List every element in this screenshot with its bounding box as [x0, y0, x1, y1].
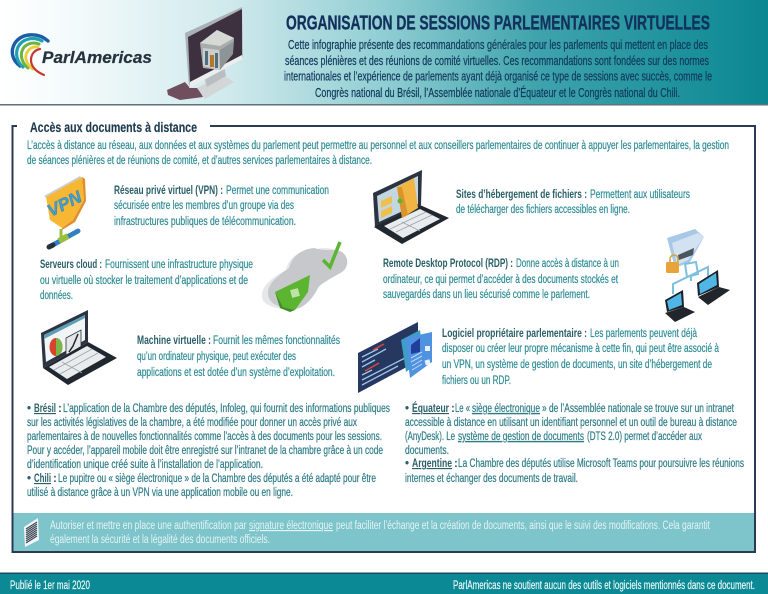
icon: VPN shield: VPN: [44, 187, 86, 221]
section intro text: de séances plénières et de réunions de comité, et d’autres services parlementaires à distance.: [27, 155, 372, 167]
logo: ParlAmericas: [12, 35, 152, 75]
examples: Équateur et Argentine: système de gestion de documents: [458, 431, 584, 443]
examples: Équateur et Argentine: Le «: [455, 403, 470, 415]
icon: laptop with folder: [373, 170, 449, 244]
section heading: Accès aux documents à distance: [30, 120, 197, 135]
examples: Brésil et Chili: L’application de la Chambre des députés, Infoleg, qui fournit des informations publiques: [63, 403, 390, 415]
item: serveurs cloud: données.: [40, 290, 73, 302]
intro text: [284, 38, 712, 100]
examples: Équateur et Argentine: siège électronique: [472, 403, 540, 415]
examples: Équateur et Argentine: Argentine: [412, 458, 452, 470]
item: machine virtuelle: Machine virtuelle :: [137, 335, 211, 347]
examples: Équateur et Argentine: (DTS 2.0) permet d’accéder aux: [587, 431, 702, 443]
examples: Équateur et Argentine: :: [451, 403, 455, 415]
examples: Équateur et Argentine: [405, 402, 744, 485]
item: serveurs cloud: [40, 259, 253, 302]
item: sites d'hébergement: Permettent aux utilisateurs: [590, 189, 690, 201]
examples: Brésil et Chili: :: [53, 473, 57, 485]
examples: Brésil et Chili: :: [58, 403, 62, 415]
footer: [0, 572, 768, 594]
banner: signature électronique: également la sécurité et la légalité des documents officiels.: [50, 534, 270, 546]
section intro text: [27, 140, 729, 167]
examples: Brésil et Chili: parlementaires à de nouvelles fonctionnalités comme l’accès à des documents pour les sessions.: [27, 431, 382, 443]
examples: Équateur et Argentine: Équateur: [412, 402, 449, 415]
item: réseau privé virtuel: [114, 185, 329, 228]
item: réseau privé virtuel: infrastructures publiques de télécommunication.: [114, 216, 296, 228]
item: RDP: sauvegardés dans un lieu sécurisé comme le parlement.: [383, 289, 590, 301]
banner: signature électronique: [14, 513, 754, 551]
item: serveurs cloud: Serveurs cloud :: [40, 259, 102, 271]
examples: Équateur et Argentine: :: [454, 458, 458, 470]
examples: Brésil et Chili: •: [27, 473, 31, 485]
item: serveurs cloud: ou virtuelle où stocker le traitement d’applications et de: [40, 275, 248, 287]
item: réseau privé virtuel: sécurisée entre les membres d’un groupe via des: [114, 200, 294, 212]
logo: ParlAmericas: ParlAmericas: [42, 48, 152, 67]
icon: laptop with charts: [41, 310, 117, 385]
item: logiciel propriétaire: fichiers ou un RDP.: [442, 375, 511, 387]
examples: Brésil et Chili: utilisé à distance grâce à un VPN via une application mobile ou en ligne.: [27, 487, 293, 499]
examples: Équateur et Argentine: (AnyDesk). Le: [405, 431, 455, 443]
banner: signature électronique: Autoriser et mettre en place une authentification par: [50, 520, 247, 532]
item: sites d'hébergement: Sites d’hébergement de fichiers :: [456, 189, 587, 201]
item: RDP: Remote Desktop Protocol (RDP) :: [383, 258, 513, 270]
item: RDP: ordinateur, ce qui permet d’accéder à des documents stockés et: [383, 274, 619, 286]
panel: accès aux documents à distance: [12, 120, 755, 552]
examples: Équateur et Argentine: •: [405, 458, 409, 470]
examples: Équateur et Argentine: documents.: [405, 445, 449, 457]
banner: signature électronique: signature électronique: [249, 520, 333, 532]
item: logiciel propriétaire: [442, 328, 719, 387]
examples: Équateur et Argentine: •: [405, 403, 409, 415]
item: RDP: Donne accès à distance à un: [516, 258, 619, 270]
examples: Brésil et Chili: d’identification unique créé suite à l’installation de l’application.: [27, 459, 263, 471]
item: machine virtuelle: applications et est dotée d’un système d’exploitation.: [137, 367, 335, 379]
item: RDP: [383, 258, 619, 301]
item: machine virtuelle: Fournit les mêmes fonctionnalités: [213, 335, 340, 347]
item: sites d'hébergement: [456, 189, 690, 216]
icon: monitor with parliament building: [167, 7, 243, 100]
item: réseau privé virtuel: Permet une communication: [226, 185, 329, 197]
examples: Brésil et Chili: •: [27, 403, 31, 415]
icon: cloud with shield and check: [262, 242, 347, 312]
examples: Brésil et Chili: Pour y accéder, l’appareil mobile doit être enregistré sur l’intranet de la chambre grâce à un code: [27, 445, 383, 457]
item: sites d'hébergement: de télécharger des fichiers accessibles en ligne.: [456, 204, 630, 216]
examples: Brésil et Chili: Le pupitre ou « siège électronique » de la Chambre des députés a été adapté pour être: [58, 473, 376, 485]
icon: code panel and documents: [358, 322, 432, 393]
icon: document: [24, 518, 39, 547]
panel: header: [0, 0, 768, 106]
examples: Équateur et Argentine: internes et échanger des documents de travail.: [405, 473, 578, 485]
item: machine virtuelle: [137, 335, 340, 379]
item: logiciel propriétaire: Logiciel propriétaire parlementaire :: [442, 328, 587, 340]
publication date: Publié le 1er mai 2020: [10, 580, 90, 592]
icon: VPN shield: [44, 176, 86, 247]
item: serveurs cloud: Fournissent une infrastructure physique: [105, 259, 253, 271]
item: réseau privé virtuel: Réseau privé virtuel (VPN) :: [114, 185, 223, 197]
examples: Brésil et Chili: [27, 403, 390, 499]
item: logiciel propriétaire: Les parlements peuvent déjà: [590, 328, 697, 340]
icon: locked folder and networked laptops: [665, 229, 730, 322]
examples: Brésil et Chili: sur les activités législatives de la chambre, a été modifiée pour donner un accès privé aux: [27, 417, 357, 429]
examples: Brésil et Chili: Brésil: [34, 403, 56, 415]
item: machine virtuelle: qu’un ordinateur physique, peut exécuter des: [137, 351, 296, 363]
examples: Brésil et Chili: Chili: [34, 473, 51, 485]
